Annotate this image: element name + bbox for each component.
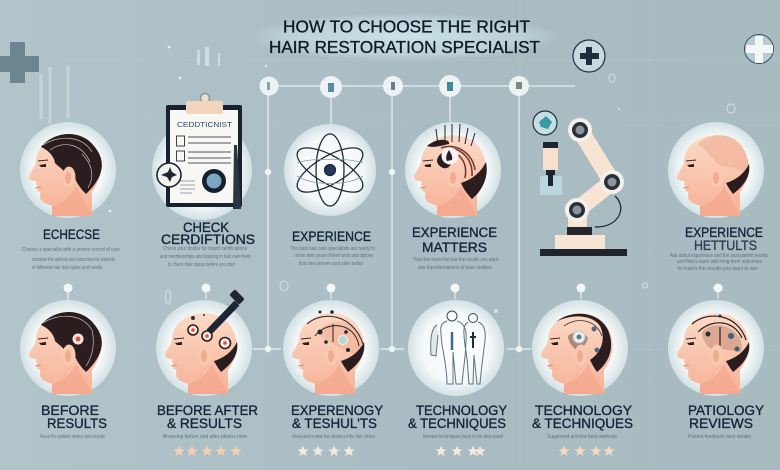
- panel: check certifications: to check their status before you start: [168, 262, 235, 268]
- panel: technology and techniques: [532, 300, 633, 456]
- panel: check certifications: CERDIFTIONS: [161, 231, 255, 247]
- panel: experience results: [668, 122, 768, 272]
- panel: before results: Read the patient stories and results: [40, 434, 105, 440]
- panel: technology figures: & TECHNIQUES: [408, 415, 506, 431]
- panel: technology figures: TECHNOLOGY: [416, 402, 508, 418]
- title: HAIR RESTORATION SPECIALIST: [269, 37, 540, 57]
- panel: before after and results: & RESULTS: [167, 415, 242, 431]
- panel: patiology reviews: REVIEWS: [689, 415, 753, 431]
- panel: experience matters: Trust the team that has the results you want: [413, 257, 499, 263]
- panel: before after and results: Browsing before and after photos here: [163, 434, 247, 440]
- panel: experience matters: see transformations of your matters: [418, 265, 492, 271]
- panel: experenogy and tesults: Read and review the stories of the hair clinics: [292, 434, 375, 440]
- head with full hair: [20, 122, 116, 218]
- panel: check certifications: [152, 94, 255, 268]
- title: [250, 13, 560, 61]
- pin markers above lower row: [64, 284, 722, 300]
- panel: technology and techniques: TECHNOLOGY: [535, 402, 633, 418]
- panel: check certifications: CHECK: [183, 219, 230, 235]
- timeline nodes: [260, 75, 529, 352]
- icon: left medical cross: [0, 42, 68, 124]
- panel: experience results: to match the results you want to see: [678, 266, 758, 272]
- panel: experience matters: EXPERIENCE: [412, 224, 497, 240]
- star rating: [435, 446, 486, 456]
- panel: before results: RESULTS: [47, 415, 107, 431]
- panel: echecse: of different hair loss types and needs: [32, 265, 102, 271]
- panel: before after and results: BEFORE AFTER: [157, 402, 258, 418]
- icon: clipboard: CEDDTICNIST: [177, 120, 232, 129]
- panel: experience atom: EXPERIENCE: [292, 228, 371, 244]
- title: HOW TO CHOOSE THE RIGHT: [283, 16, 530, 36]
- panel: check certifications: Check your doctor for board certifications: [163, 246, 247, 252]
- panel: echecse: Choose a specialist with a proven record of care: [22, 247, 120, 253]
- icon: syringe device: [540, 142, 562, 195]
- panel: technology figures: [408, 300, 508, 456]
- icon: clipboard: [157, 94, 242, 209]
- panel: echecse: ECHECSE: [43, 226, 100, 242]
- panel: echecse: [20, 122, 120, 271]
- panel: experience atom: The best hair care specialists are ready to: [290, 246, 375, 252]
- panel: before results: [20, 300, 116, 440]
- star rating: [558, 446, 615, 456]
- panel: experience matters: [405, 122, 501, 271]
- panel: robotic arm: [533, 111, 627, 256]
- icon: plus badge: [573, 40, 605, 72]
- panel: experience results: EXPERIENCE: [685, 224, 763, 240]
- panel: patiology reviews: Patient feedback best details: [688, 434, 751, 440]
- panel: technology and techniques: & TECHNIQUES: [532, 415, 633, 431]
- panel: patiology reviews: [668, 300, 765, 440]
- panel: echecse: consider the options and outcomes for patients: [32, 257, 115, 263]
- panel: experience matters: MATTERS: [422, 239, 487, 255]
- panel: technology and techniques: Supported and the best methods: [547, 434, 617, 440]
- panel: experenogy and tesults: EXPERENOGY: [291, 402, 384, 418]
- star rating: [173, 446, 242, 456]
- panel: technology figures: Newest techniques have to be discussed: [423, 434, 503, 440]
- panel: experience atom: [284, 124, 376, 267]
- panel: experience results: HETTULTS: [694, 237, 757, 253]
- panel: before after and results: [156, 289, 258, 456]
- icon: atom: [291, 134, 369, 206]
- panel: experenogy and tesults: [283, 300, 384, 456]
- icon: white plus badge: [744, 34, 774, 64]
- panel: before results: BEFORE: [41, 402, 99, 418]
- star rating: [297, 446, 355, 456]
- decorative specks: [109, 46, 735, 313]
- panel: experenogy and tesults: & TESHUL'TS: [292, 415, 377, 431]
- panel: experience results: Ask about experience and the past patient results: [670, 253, 768, 259]
- panel: experience atom: share their years of their work and options: [295, 253, 373, 259]
- panel: experience results: and find a team with long-term outcomes: [677, 259, 762, 265]
- connector lines: [253, 86, 575, 349]
- icon: robot arm: [540, 118, 627, 256]
- icon: small lens badge: [533, 111, 557, 135]
- panel: experience atom: that are proven and safe today: [299, 261, 363, 267]
- icon: two body figures: [431, 311, 485, 384]
- panel: check certifications: and memberships and training in hair care field: [160, 254, 250, 260]
- panel: patiology reviews: PATIOLOGY: [688, 402, 765, 418]
